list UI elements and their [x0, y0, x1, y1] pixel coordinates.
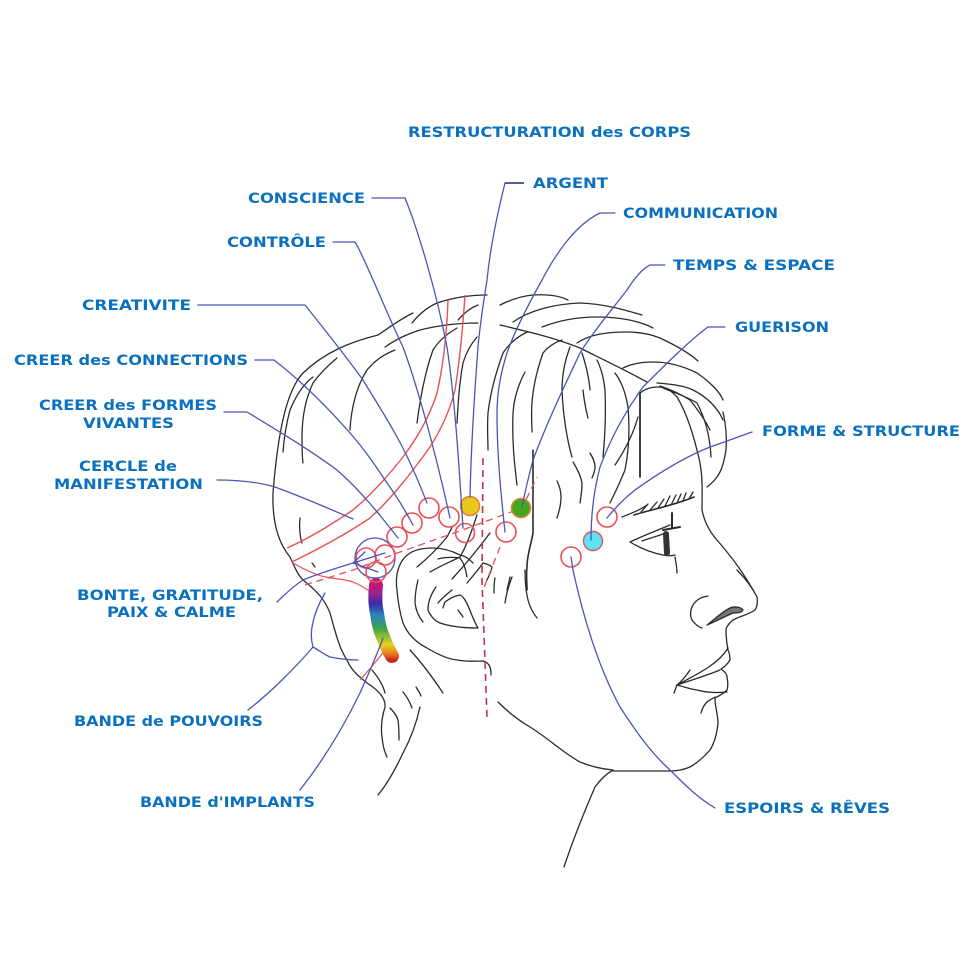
label: creer des formes vivantes	[39, 398, 217, 432]
label: creer des formes vivantes: VIVANTES	[83, 416, 174, 432]
red dashed guide lines	[305, 458, 537, 717]
label: argent: ARGENT	[533, 176, 609, 192]
title: RESTRUCTURATION des CORPS	[408, 125, 691, 141]
label: bonte gratitude paix et calme: PAIX & CALME	[107, 605, 236, 621]
label: communication: COMMUNICATION	[623, 206, 778, 222]
nostril	[707, 607, 743, 625]
label: bande d'implants: BANDE d'IMPLANTS	[140, 795, 315, 811]
leader: forme et structure	[607, 432, 752, 518]
leader: temps et espace	[522, 265, 665, 507]
label: temps et espace: TEMPS & ESPACE	[673, 258, 835, 274]
leader: controle	[333, 242, 450, 518]
head line drawing: ear and nape	[372, 515, 492, 795]
label: bonte gratitude paix et calme	[77, 588, 263, 621]
head line drawing: eye and lashes	[622, 492, 694, 573]
label: cercle de manifestation: CERCLE de	[79, 459, 177, 475]
label: creativite: CREATIVITE	[82, 298, 191, 314]
label: cercle de manifestation	[54, 459, 203, 493]
leader: guerison	[591, 327, 725, 540]
red band lines	[287, 295, 465, 680]
leader: conscience	[372, 198, 463, 528]
label: bande de pouvoirs: BANDE de POUVOIRS	[74, 714, 263, 730]
label: creer des connections: CREER des CONNECTIONS	[14, 353, 248, 369]
leader: creativite	[198, 305, 427, 503]
leader: creer des formes vivantes	[224, 412, 398, 538]
label: cercle de manifestation: MANIFESTATION	[54, 477, 203, 493]
point circles	[387, 496, 617, 567]
label: espoirs et reves: ESPOIRS & RÊVES	[724, 800, 890, 817]
label: conscience: CONSCIENCE	[248, 191, 365, 207]
circle of manifestation	[355, 538, 395, 582]
label: guerison: GUERISON	[735, 320, 829, 336]
label: bonte gratitude paix et calme: BONTE, GRATITUDE,	[77, 588, 263, 604]
label: forme et structure: FORME & STRUCTURE	[762, 424, 960, 440]
leader: cercle de manifestation	[217, 480, 353, 519]
head line drawing: face profile	[498, 510, 757, 867]
label: controle: CONTRÔLE	[227, 233, 326, 251]
leader: argent	[470, 183, 505, 497]
leader: bonte gratitude	[277, 552, 385, 602]
label: creer des formes vivantes: CREER des FORMES	[39, 398, 217, 414]
leader: bande de pouvoirs	[248, 593, 358, 710]
leader: creer des connections	[255, 360, 413, 525]
label: argent	[505, 176, 609, 192]
leader: communication	[497, 213, 615, 532]
rainbow implant band	[375, 585, 392, 656]
head line drawing: hair	[273, 295, 726, 757]
leader: espoirs et reves	[571, 557, 715, 808]
leader: bande d'implants	[300, 638, 383, 790]
